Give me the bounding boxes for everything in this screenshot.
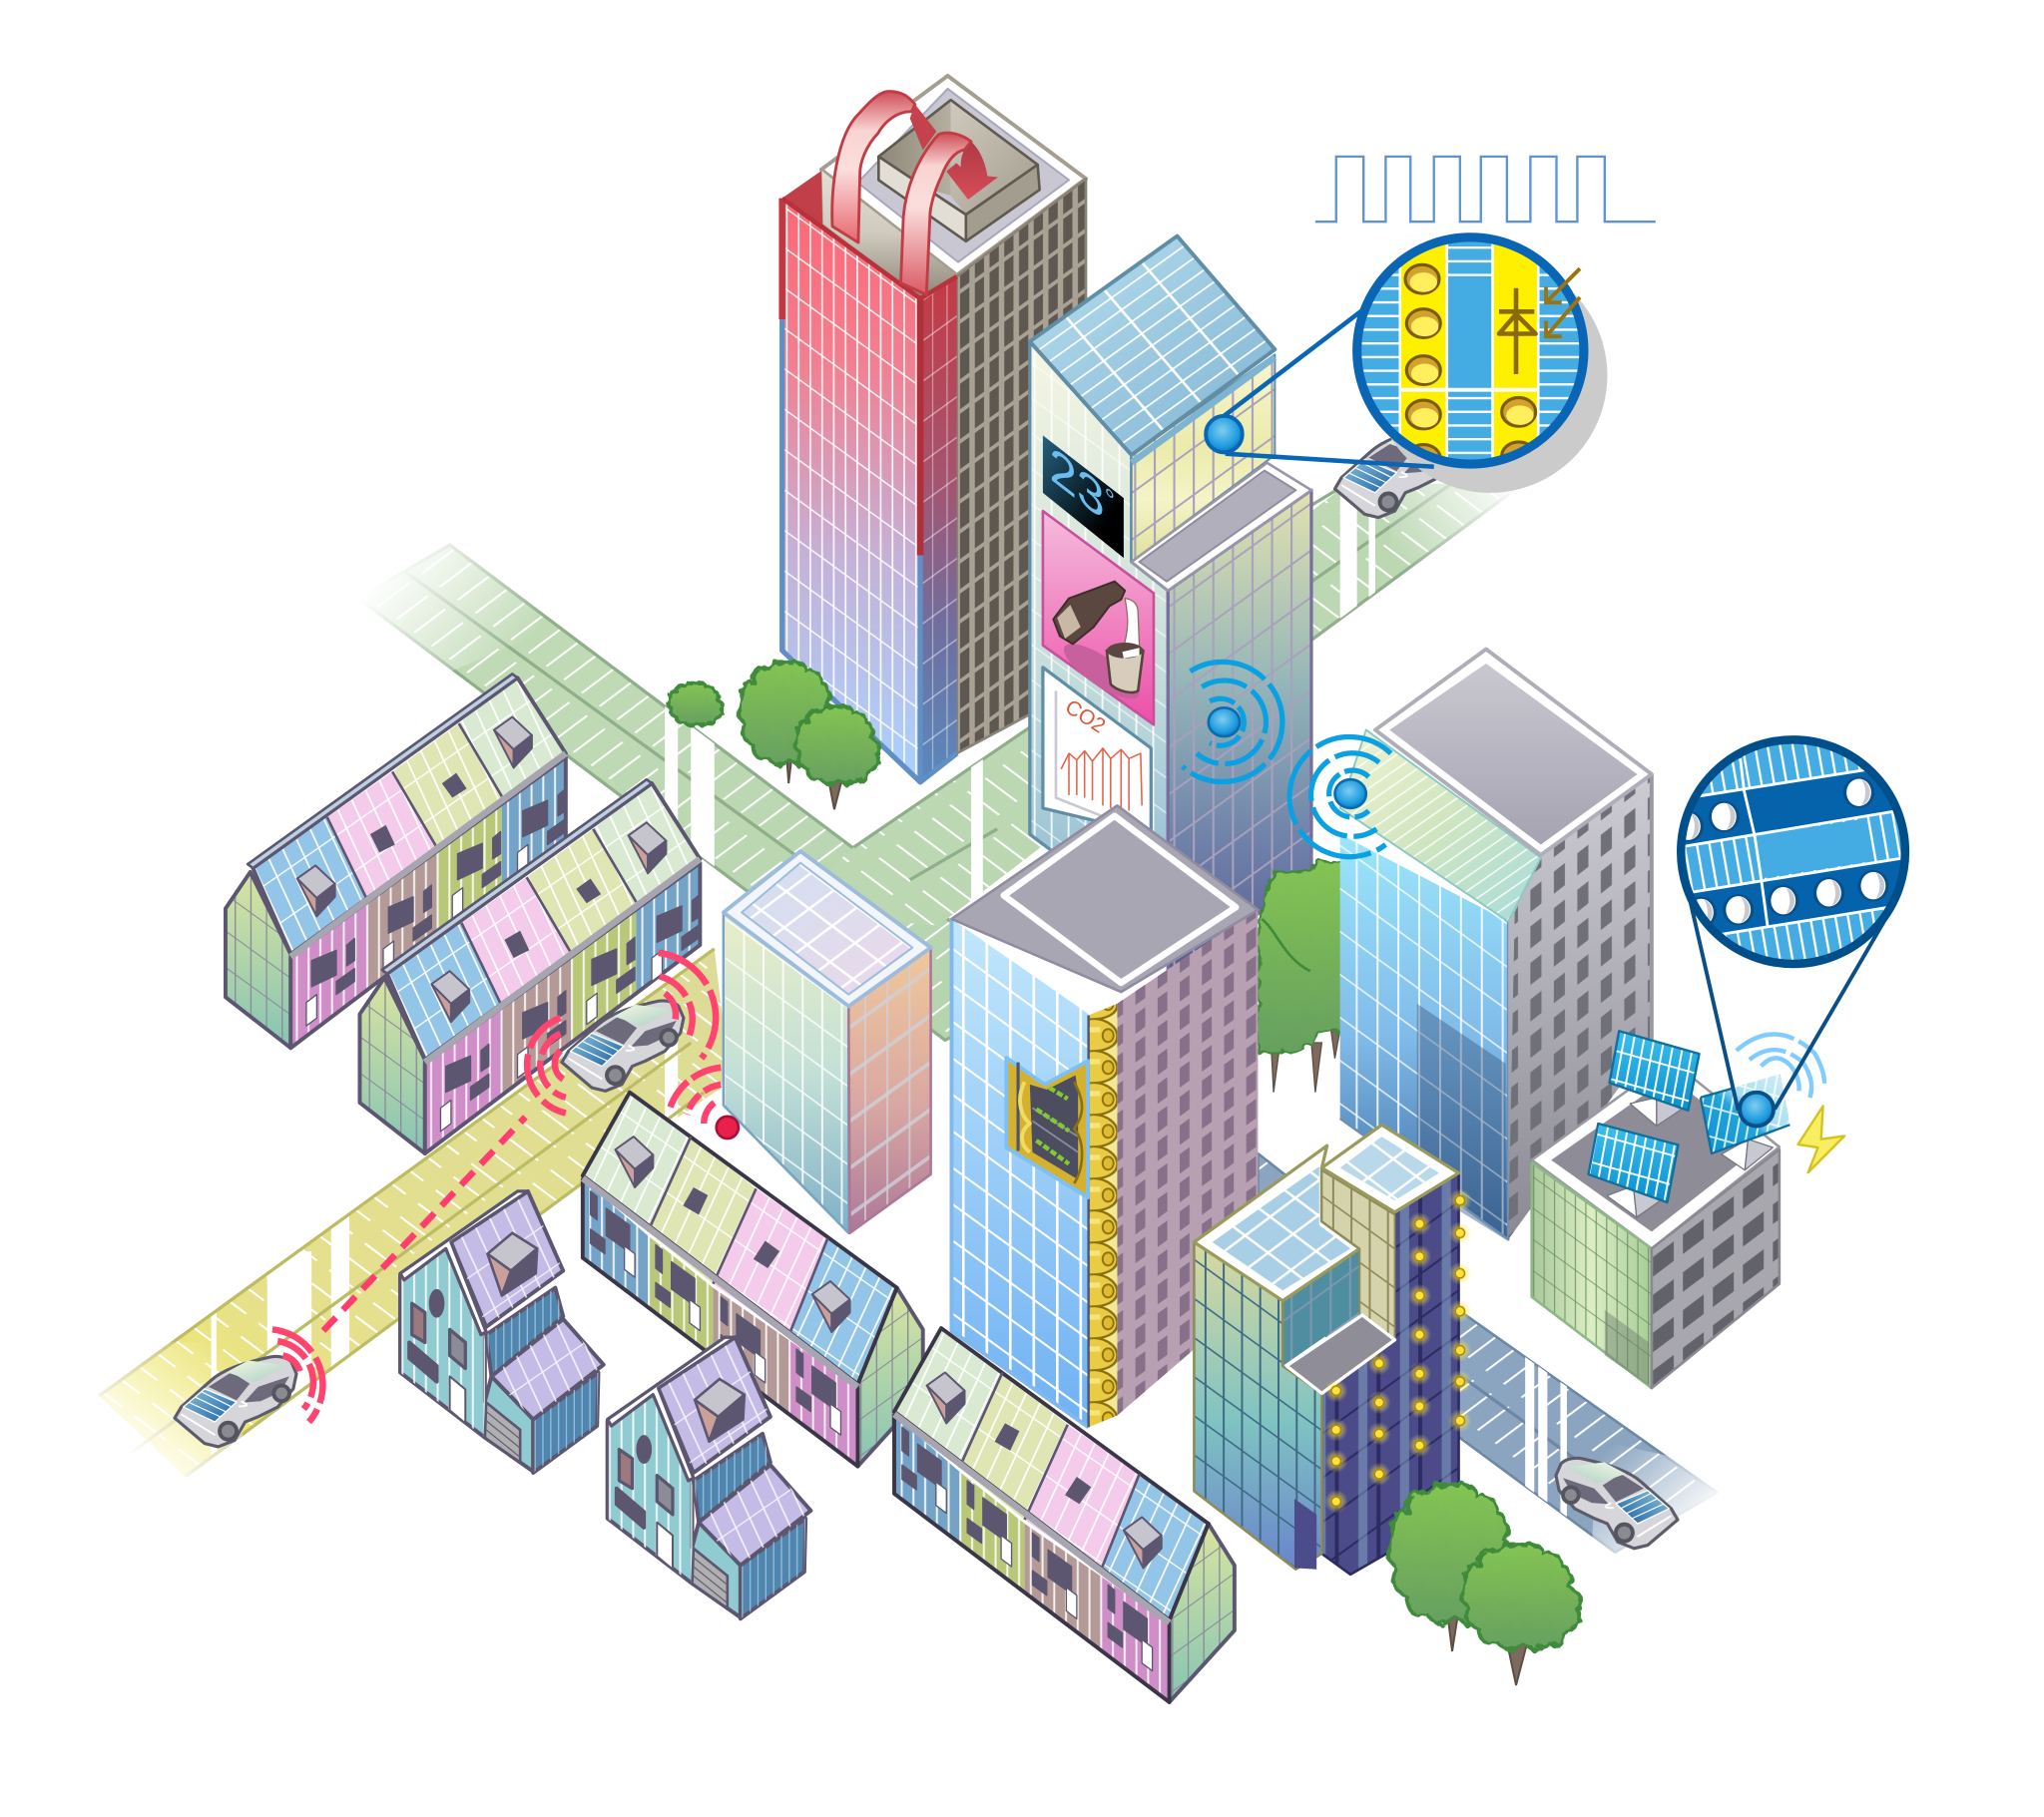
building: cream glass tower xyxy=(724,851,931,1233)
road: yellow south-west avenue xyxy=(98,948,723,1478)
solar panel C xyxy=(1701,1074,1790,1170)
lower tower face xyxy=(1168,490,1311,991)
lens content xyxy=(1685,744,1901,960)
lens: solar cell detail with diode xyxy=(1224,228,1607,493)
billboard: temperature display 23 degrees xyxy=(1043,434,1124,558)
sensor dot on glass tower xyxy=(1334,779,1366,808)
signal: red arcs at bottom-left car xyxy=(272,1329,322,1422)
grey roof xyxy=(951,805,1258,992)
tree: right trunk xyxy=(1506,1635,1529,1685)
row houses: front terrace xyxy=(894,1328,1235,1702)
tower grey side with windows xyxy=(957,179,1086,753)
row houses: back terrace xyxy=(226,674,566,1048)
cream left facade xyxy=(724,912,848,1233)
house: detached with garage xyxy=(400,1191,604,1473)
signal: blue arcs on glass tower xyxy=(1289,736,1391,857)
sensor dot on yellow facade xyxy=(1206,416,1243,452)
icon: light arrows xyxy=(1546,268,1580,336)
lens ring xyxy=(1357,237,1584,464)
trees: front pair xyxy=(1387,1483,1580,1685)
road: green north-west avenue xyxy=(369,543,950,1042)
grey step roof xyxy=(1286,1315,1395,1393)
grey windowed side xyxy=(1508,774,1652,1239)
tree: front trunk xyxy=(1447,1609,1459,1651)
arrow: ribbon passing over the shaft xyxy=(910,105,936,150)
tree: right crown xyxy=(1461,1544,1580,1650)
lens pointer lines xyxy=(1687,886,1886,1111)
icon: lightning bolt xyxy=(1798,1106,1844,1172)
arrow: red head into the shaft xyxy=(946,142,998,200)
road: blue-grey south-east avenue xyxy=(1258,1151,1719,1554)
lens pointer lines xyxy=(1224,293,1434,467)
lens: solar panel detail xyxy=(1677,735,1910,1112)
billboard tower upper yellow facade xyxy=(1132,354,1275,562)
tree cluster behind towers xyxy=(1258,859,1345,1093)
signal: red link dashed line xyxy=(323,1117,525,1331)
billboard: temperature display 23 degrees: 23 xyxy=(1049,434,1105,532)
solar panel A xyxy=(1610,1031,1700,1126)
row houses: middle terrace xyxy=(583,1093,923,1467)
row houses: second terrace xyxy=(359,779,700,1153)
car: top right behind lens xyxy=(1334,427,1456,518)
arrow: front hot-air ribbon xyxy=(901,133,971,294)
chart: CO2 panel xyxy=(1043,668,1151,834)
cream solar roof xyxy=(724,851,931,1006)
lower solar roof xyxy=(1194,1145,1359,1301)
solar roof xyxy=(1030,236,1275,463)
red beacon dot xyxy=(717,1117,739,1138)
building: tall heat-reflecting tower xyxy=(782,76,1086,782)
cube grey side xyxy=(1652,1149,1780,1388)
car: centre car with solar hood xyxy=(562,1001,684,1091)
tower roof xyxy=(782,76,1086,298)
arrow: rear hot-air ribbon xyxy=(832,92,915,242)
cube green facade xyxy=(1532,1162,1652,1388)
road fades xyxy=(326,443,1564,690)
teal glass notch xyxy=(1282,1248,1359,1366)
blue glass facade xyxy=(951,919,1089,1427)
signal: red arcs around the car xyxy=(527,953,716,1114)
beige upper facade xyxy=(1321,1170,1395,1340)
navy facade xyxy=(1321,1173,1459,1575)
lens shadow xyxy=(1372,258,1607,493)
sensor dot on solar panel xyxy=(1740,1093,1774,1127)
tree: small trunk xyxy=(826,769,844,809)
tree: large crown xyxy=(739,661,836,766)
glass left facade xyxy=(1194,1242,1321,1570)
battery cut-out xyxy=(1006,1058,1088,1197)
trees near tower xyxy=(668,661,879,809)
building: tall grey and blue glass tower xyxy=(1340,650,1652,1239)
billboard: temperature display 23 degrees: ° xyxy=(1105,481,1115,518)
tree: front crown xyxy=(1387,1483,1517,1625)
upper solar roof xyxy=(1321,1125,1459,1212)
car: bottom-right xyxy=(1556,1458,1678,1549)
mauve windowed side xyxy=(1117,908,1258,1416)
flat roof xyxy=(1375,650,1652,855)
tree: shrub xyxy=(668,682,723,725)
chart: CO2 panel: CO2 xyxy=(1061,695,1110,738)
building: stepped glass tower with lights xyxy=(1194,1125,1472,1575)
lens content xyxy=(1361,241,1579,459)
tree: small crown xyxy=(794,705,879,785)
lens ring xyxy=(1681,739,1905,964)
yellow facade lights xyxy=(1324,1188,1472,1514)
chart: square pulse signal xyxy=(1315,157,1656,222)
solar panel B xyxy=(1589,1124,1679,1217)
building: rooftop solar cube xyxy=(1532,1031,1790,1388)
car: bottom-left xyxy=(175,1356,296,1447)
tower red-to-blue facade xyxy=(782,199,957,782)
building: centre billboard tower xyxy=(1030,236,1311,991)
billboard: pouring milk advert xyxy=(1043,511,1154,724)
insulation coil strip xyxy=(1089,1004,1117,1427)
building: centre tower with batteries xyxy=(951,805,1258,1427)
glass facade xyxy=(1340,808,1508,1239)
house: detached with garage, front xyxy=(608,1337,810,1618)
slanted solar section xyxy=(1340,730,1541,922)
signal: blue arcs on tower xyxy=(1183,662,1282,782)
cream right facade xyxy=(848,948,931,1233)
lower tower roof xyxy=(1132,463,1311,591)
road: green north-east avenue xyxy=(834,483,1511,926)
signal: light-blue arcs over solar panel xyxy=(1737,1035,1824,1106)
signal: red beacon arcs xyxy=(670,1068,721,1124)
tree: large trunk xyxy=(786,749,792,783)
billboard tower left facade xyxy=(1030,341,1168,939)
sensor dot on tower xyxy=(1209,707,1240,736)
cube roof xyxy=(1532,1060,1780,1248)
